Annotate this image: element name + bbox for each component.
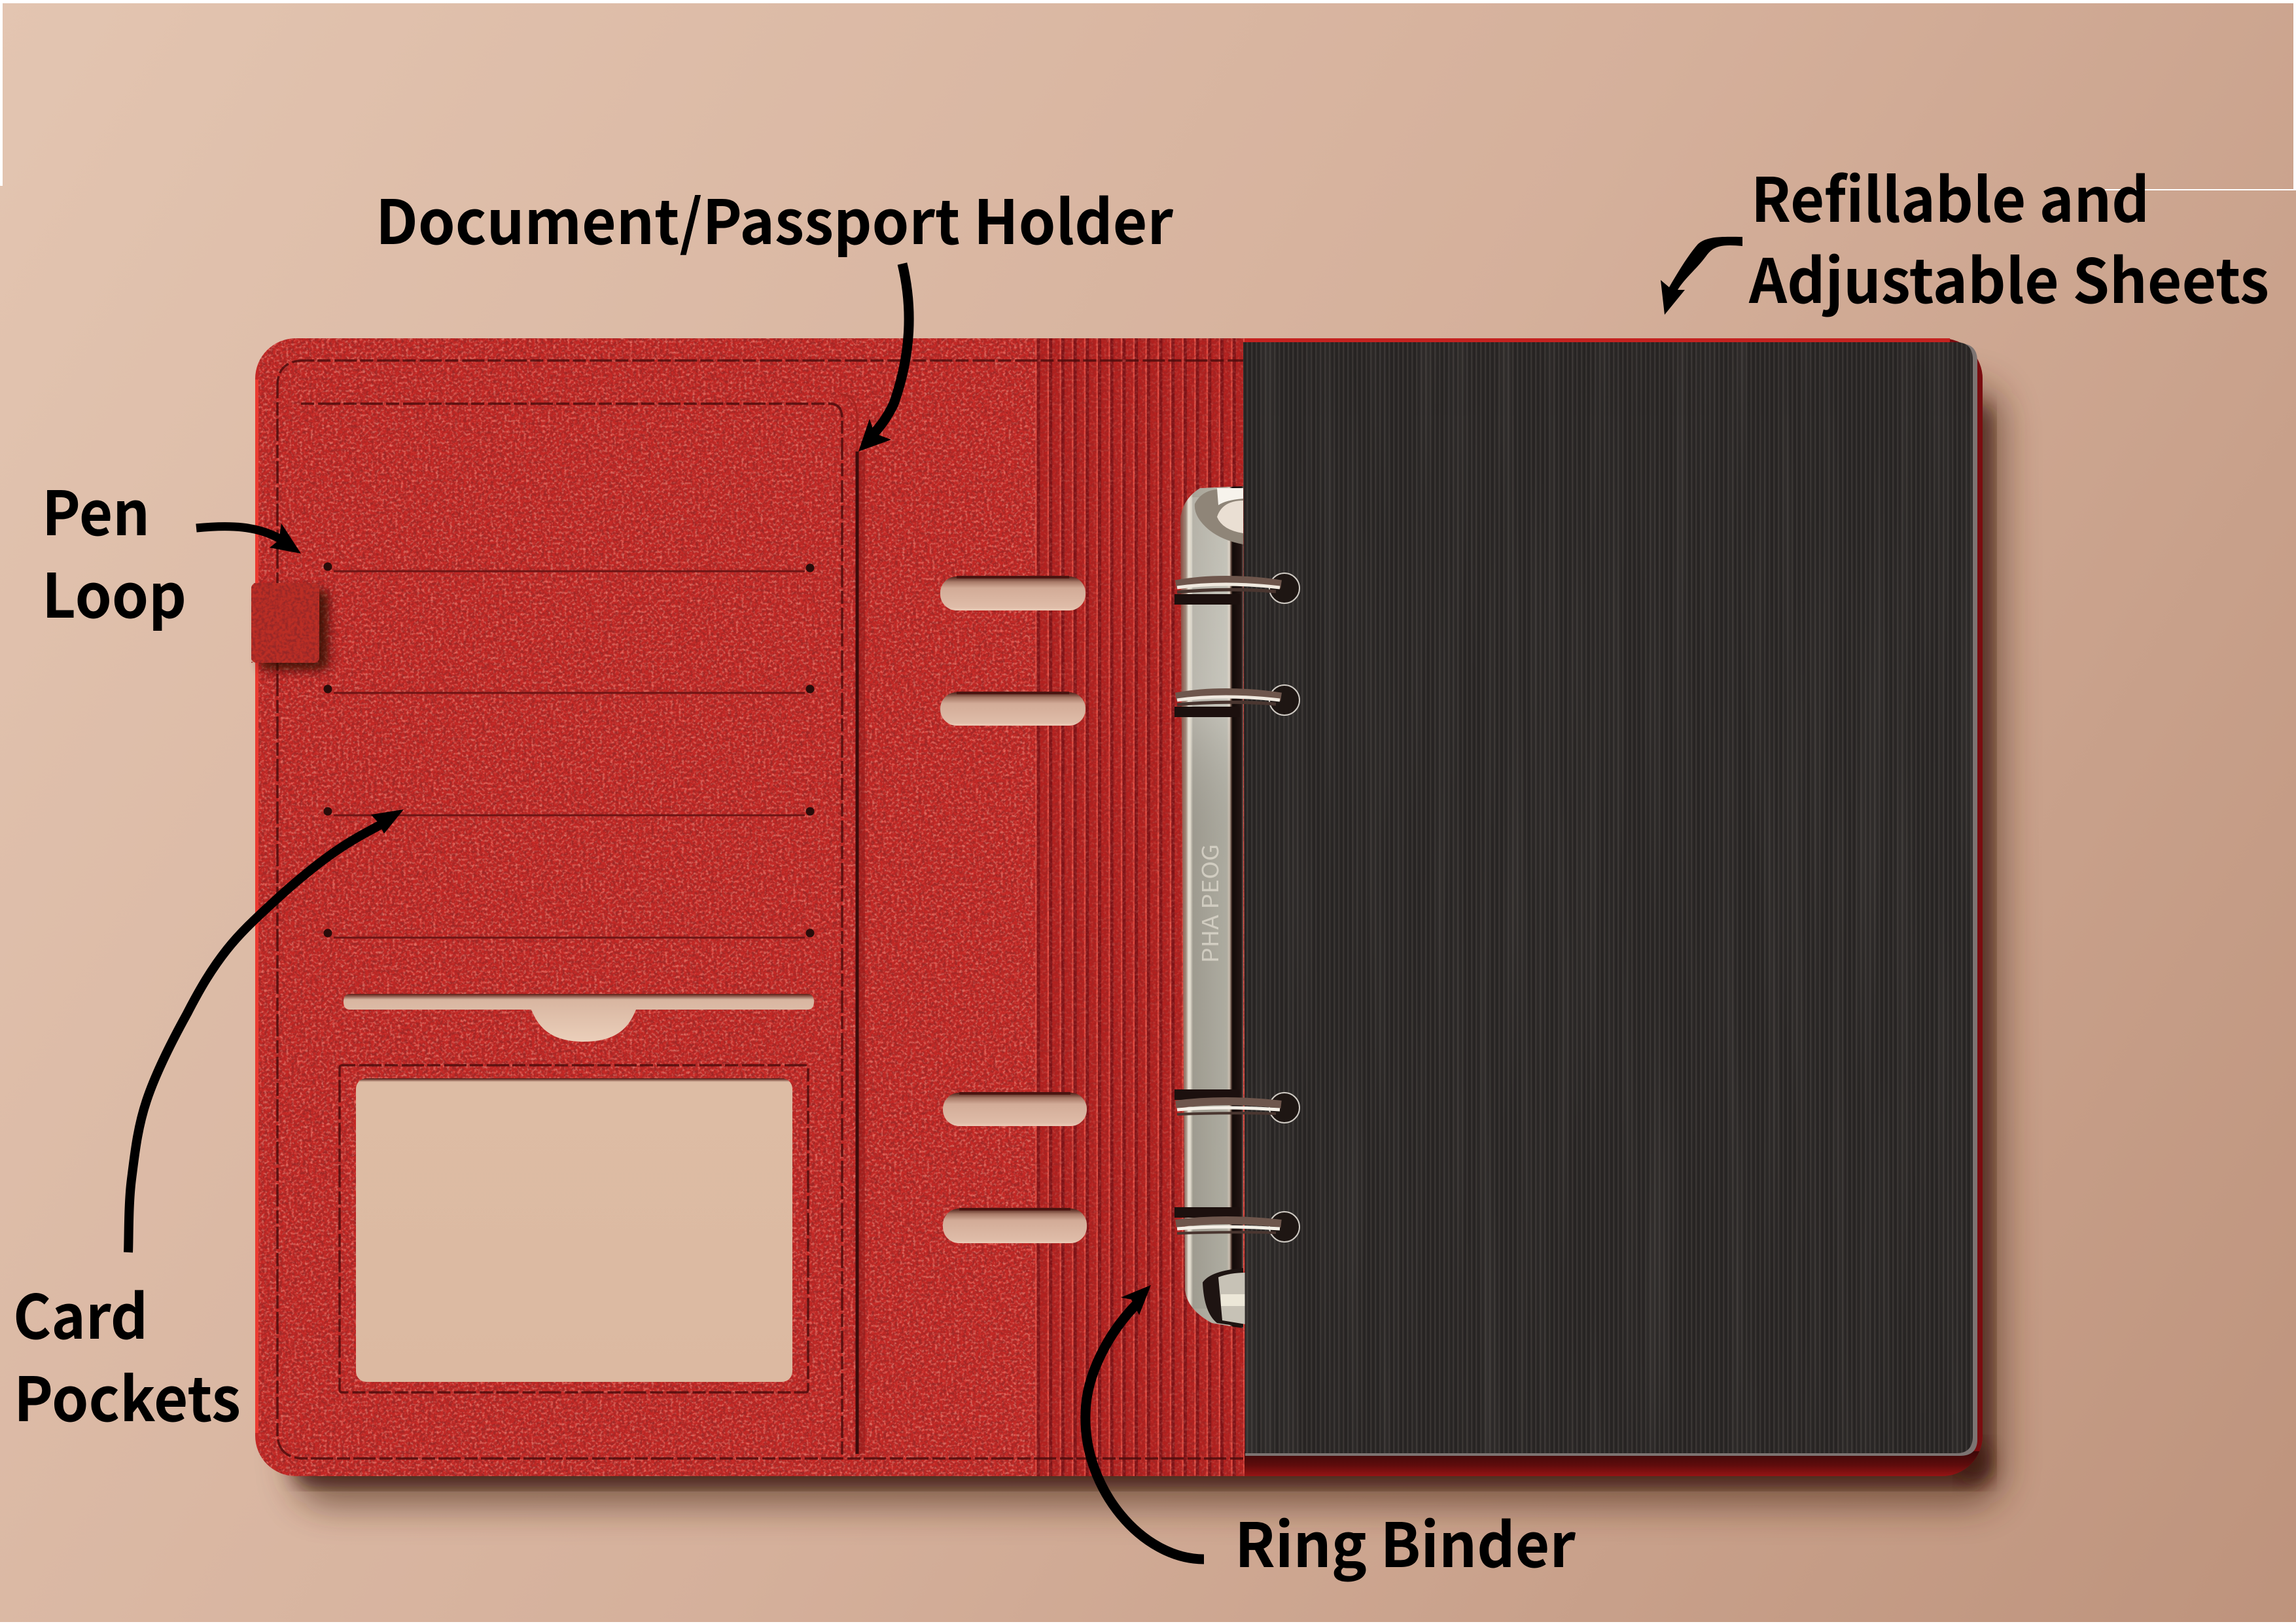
label: Pen Loop: Loop xyxy=(42,547,186,635)
label: Refillable and Adjustable Sheets: Refillable and xyxy=(1751,151,2149,239)
label: Ring Binder: Ring Binder xyxy=(1235,1496,1576,1585)
card pocket slits xyxy=(323,563,814,938)
ring 2 bar xyxy=(1174,707,1240,717)
ring 1 bar xyxy=(1174,594,1240,605)
ID window slot with thumb notch xyxy=(344,994,814,1042)
label: Refillable and Adjustable Sheets: Adjustable Sheets xyxy=(1748,232,2269,321)
ribbed spine xyxy=(1035,338,1245,1476)
panel: document pocket edge xyxy=(301,395,861,1458)
leather grain xyxy=(258,338,1037,1476)
ring and hole 1 xyxy=(1176,573,1299,603)
label: Refillable and Adjustable Sheets xyxy=(1748,151,2269,321)
ring and hole 3 xyxy=(1176,1093,1299,1123)
binder rings and punched holes xyxy=(1176,573,1299,1242)
arrow: Refillable and Adjustable Sheets xyxy=(1661,237,1742,315)
arrow: Pen Loop xyxy=(196,523,301,554)
pen loop xyxy=(251,583,328,670)
ring and hole 4 xyxy=(1176,1212,1299,1242)
ring and hole 2 xyxy=(1176,685,1299,715)
elastic slots xyxy=(940,576,1087,1243)
red cover xyxy=(255,338,1983,1476)
refill sheets xyxy=(1176,342,1977,1456)
arrow: Card Pockets xyxy=(128,809,404,1252)
label: Card Pockets xyxy=(13,1268,241,1439)
stitching: outer xyxy=(277,361,1243,1458)
bottom end cap xyxy=(1203,1268,1246,1327)
label: Pen Loop: Pen xyxy=(42,465,150,553)
ID card window xyxy=(340,1065,808,1392)
embossed brand mark: PHA PEOG xyxy=(1193,844,1225,963)
ring 3 bar xyxy=(1174,1089,1240,1100)
label: Card Pockets: Card xyxy=(13,1268,148,1356)
label: Card Pockets: Pockets xyxy=(14,1350,241,1439)
label: Pen Loop xyxy=(42,465,186,635)
arrow: Ring Binder xyxy=(1086,1285,1204,1559)
arrow: Document/Passport Holder xyxy=(858,264,909,451)
cast shadow xyxy=(294,386,2002,1505)
ring 4 bar xyxy=(1174,1207,1240,1218)
ring binder mechanism xyxy=(1174,486,1246,1328)
top end cap xyxy=(1195,488,1243,544)
notebook xyxy=(251,338,2002,1505)
label: Document/Passport Holder: Document/Passport Holder xyxy=(376,173,1173,262)
